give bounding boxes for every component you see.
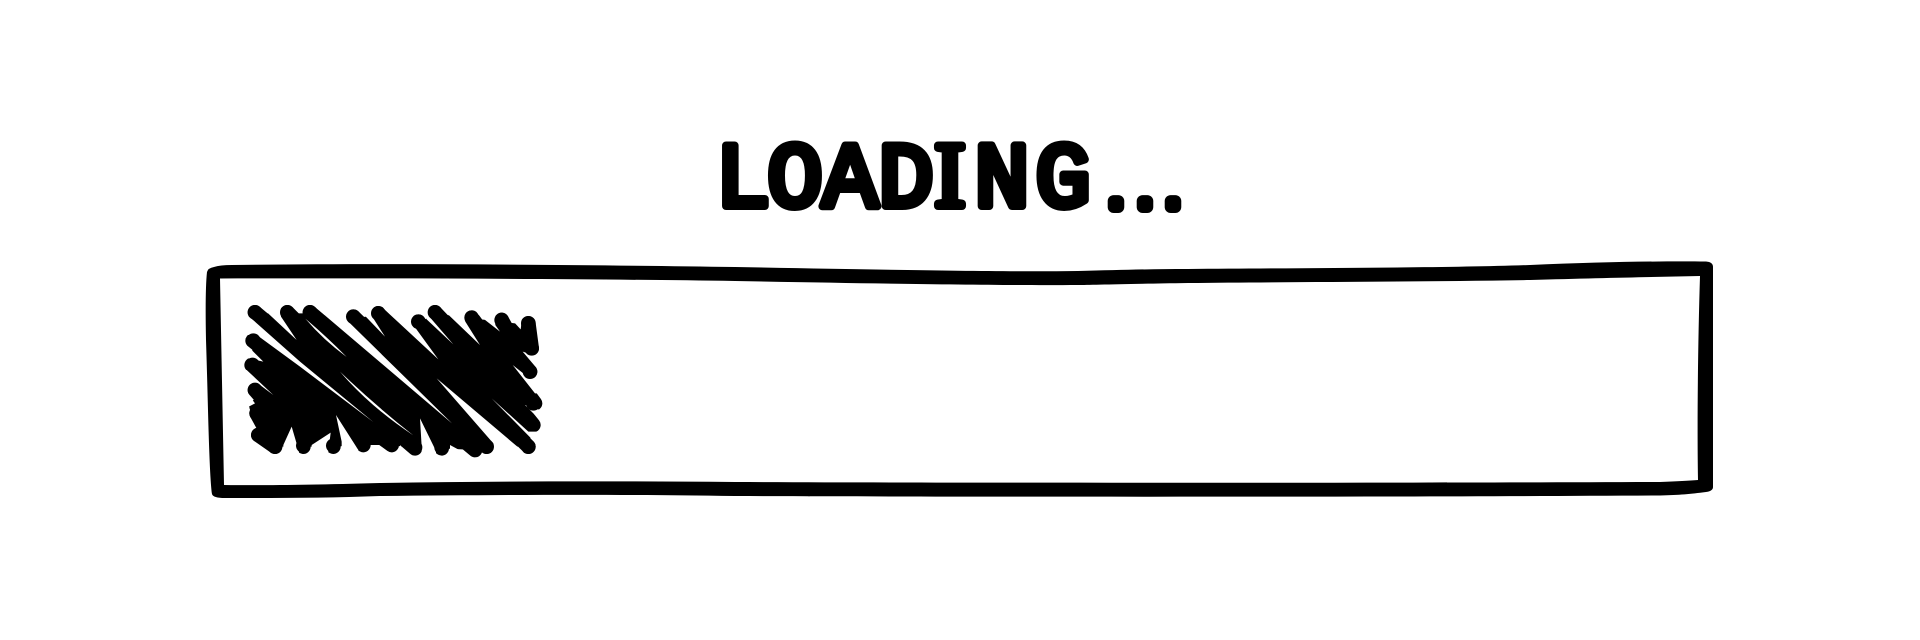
progress scribble fill xyxy=(240,300,547,460)
progress bar frame xyxy=(206,261,1713,498)
scribble gaps xyxy=(240,300,547,460)
title: LOADING...: LOADING xyxy=(715,124,1091,234)
title: LOADING...: ... xyxy=(1104,175,1185,220)
scribble strokes xyxy=(252,312,535,450)
scribble mass xyxy=(252,313,535,450)
scribble stroke ends xyxy=(245,305,541,456)
